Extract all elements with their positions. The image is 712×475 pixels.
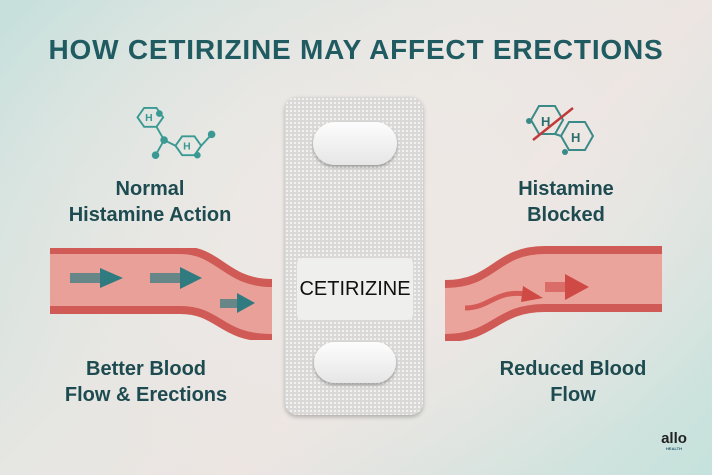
icon: histamine blocked bbox=[526, 105, 594, 155]
logo: allo health: HEALTH bbox=[666, 446, 682, 451]
text: better blood flow: Flow & Erections bbox=[65, 384, 227, 406]
arrows bbox=[70, 267, 255, 313]
pill bottom bbox=[314, 342, 396, 383]
icon: histamine molecule normal bbox=[136, 107, 216, 159]
icon: histamine molecule normal: H bbox=[145, 113, 153, 124]
heading: normal histamine action: Normal bbox=[116, 178, 184, 200]
text: better blood flow: Better Blood bbox=[86, 358, 206, 380]
text: reduced blood flow: Reduced Blood bbox=[500, 358, 646, 380]
logo: allo health: allo bbox=[661, 430, 687, 447]
text: reduced blood flow bbox=[500, 358, 646, 406]
pill top bbox=[313, 122, 397, 165]
heading: histamine blocked: Blocked bbox=[527, 204, 605, 226]
arrows bbox=[465, 274, 589, 308]
heading: histamine blocked: Histamine bbox=[518, 178, 614, 200]
heading: normal histamine action bbox=[69, 178, 231, 226]
text: better blood flow bbox=[65, 358, 227, 406]
label: cetirizine: CETIRIZINE bbox=[299, 278, 411, 300]
icon: histamine blocked: H bbox=[541, 114, 550, 129]
vessel: reduced flow bbox=[445, 246, 662, 341]
text: reduced blood flow: Flow bbox=[550, 384, 596, 406]
label: cetirizine bbox=[297, 258, 413, 320]
icon: histamine molecule normal: H bbox=[183, 142, 191, 153]
icon: histamine blocked: H bbox=[571, 130, 580, 145]
heading: normal histamine action: Histamine Action bbox=[69, 204, 231, 226]
pill pack bbox=[285, 97, 423, 415]
heading: histamine blocked bbox=[518, 178, 614, 226]
vessel: normal flow bbox=[50, 248, 272, 340]
title: HOW CETIRIZINE MAY AFFECT ERECTIONS bbox=[48, 34, 664, 65]
